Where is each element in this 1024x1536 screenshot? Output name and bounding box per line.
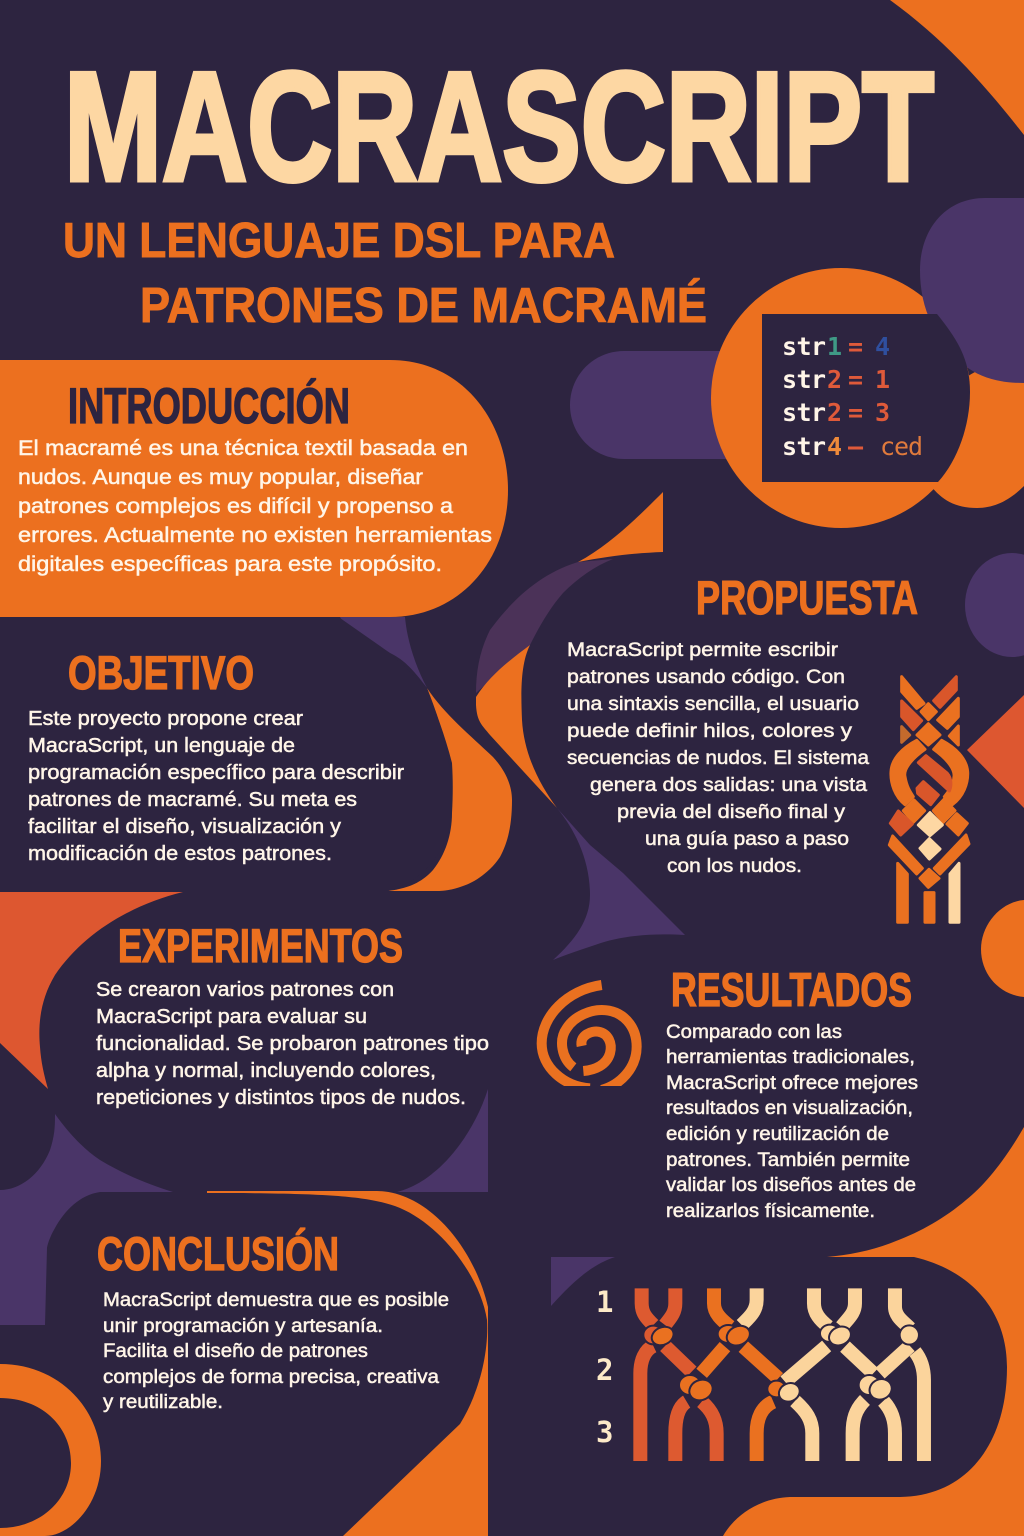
body: objetivo — [28, 708, 404, 865]
body: propuesta: una guía paso a paso — [645, 828, 849, 850]
body: experimentos: Se crearon varios patrones con — [96, 979, 394, 1001]
heading: propuesta: PROPUESTA — [696, 571, 918, 624]
code lines: 1 — [875, 365, 890, 394]
purple blob right of propuesta — [965, 553, 1024, 657]
red diamond right edge — [967, 695, 1024, 808]
code lines: = — [848, 398, 863, 427]
body: resultados: resultados en visualización, — [666, 1098, 913, 1119]
orange shape bottom right — [723, 1127, 1024, 1536]
panel: propuesta — [560, 571, 920, 880]
row numbers: 2 — [596, 1353, 613, 1387]
body: conclusión — [103, 1290, 449, 1413]
code lines: 4 — [827, 432, 842, 461]
body: experimentos: MacraScript para evaluar su — [96, 1006, 367, 1028]
body: introducción: digitales específicas para este propósito. — [18, 553, 442, 576]
row numbers: 1 — [596, 1285, 613, 1319]
icon: macramé pattern — [889, 677, 969, 922]
body: propuesta: con los nudos. — [667, 855, 802, 877]
code lines: ced — [880, 432, 923, 461]
body: introducción — [18, 437, 492, 576]
body: experimentos: funcionalidad. Se probaron patrones tipo — [96, 1033, 489, 1055]
body: experimentos: repeticiones y distintos tipos de nudos. — [96, 1087, 466, 1109]
panel: experimentos — [90, 919, 490, 1115]
body: propuesta — [567, 639, 869, 877]
purple shapes between experimentos and conclusión — [0, 1089, 488, 1325]
body: resultados: Comparado con las — [666, 1022, 842, 1043]
body: introducción: nudos. Aunque es muy popular, diseñar — [18, 466, 423, 489]
heading: conclusión: CONCLUSIÓN — [97, 1227, 339, 1280]
row numbers — [596, 1285, 613, 1449]
code lines: 4 — [875, 332, 890, 361]
code lines: 2 — [827, 398, 842, 427]
code lines: – — [848, 432, 864, 461]
body: objetivo: MacraScript, un lenguaje de — [28, 735, 295, 757]
code lines: = — [848, 365, 863, 394]
icon: spiral — [542, 985, 637, 1090]
body: objetivo: modificación de estos patrones. — [28, 843, 332, 865]
purple corner of knot panel — [551, 1257, 615, 1306]
body: experimentos: alpha y normal, incluyendo colores, — [96, 1060, 436, 1082]
body: conclusión: unir programación y artesanía. — [103, 1316, 383, 1337]
body: conclusión: Facilita el diseño de patrones — [103, 1341, 368, 1362]
body: propuesta: una sintaxis sencilla, el usuario — [567, 693, 859, 715]
code panel — [762, 314, 970, 482]
heading: experimentos: EXPERIMENTOS — [118, 919, 403, 972]
body: resultados: edición y reutilización de — [666, 1124, 889, 1145]
orange border of conclusión — [207, 1191, 488, 1536]
body: introducción: El macramé es una técnica textil basada en — [18, 437, 468, 460]
body: propuesta: previa del diseño final y — [617, 801, 845, 823]
body: conclusión: y reutilizable. — [103, 1392, 223, 1413]
body: propuesta: puede definir hilos, colores y — [567, 720, 852, 742]
code lines: str — [782, 398, 826, 427]
body: objetivo: Este proyecto propone crear — [28, 708, 303, 730]
orange crescent right of objetivo — [388, 688, 512, 891]
body: introducción: errores. Actualmente no existen herramientas — [18, 524, 492, 547]
body: resultados: patrones. También permite — [666, 1150, 910, 1171]
orange blob right edge — [981, 900, 1024, 997]
purple pill behind code panel — [570, 351, 730, 459]
orange tip and purple swoosh — [476, 492, 685, 960]
orange crescent left of propuesta — [476, 645, 557, 808]
orange lobe behind code panel — [926, 372, 1024, 508]
knot strands and knots — [640, 1288, 924, 1461]
body: objetivo: programación específico para describir — [28, 762, 404, 784]
purple blob top right — [920, 198, 1024, 383]
body: propuesta: patrones usando código. Con — [567, 666, 845, 688]
body: conclusión: complejos de forma precisa, creativa — [103, 1367, 439, 1388]
body: objetivo: facilitar el diseño, visualización y — [28, 816, 341, 838]
purple wedge below propuesta — [553, 808, 685, 960]
subtitle: PATRONES DE MACRAMÉ — [140, 279, 707, 333]
body: propuesta: genera dos salidas: una vista — [590, 774, 867, 796]
panel: objetivo — [0, 618, 452, 891]
heading: introducción: INTRODUCCIÓN — [68, 378, 350, 434]
heading: resultados: RESULTADOS — [671, 963, 912, 1016]
row numbers: 3 — [596, 1415, 613, 1449]
body: resultados: validar los diseños antes de — [666, 1175, 916, 1196]
panel: introducción — [0, 360, 508, 617]
body: propuesta: MacraScript permite escribir — [567, 639, 839, 661]
code lines: str — [782, 432, 826, 461]
code lines: str — [782, 365, 826, 394]
body: conclusión: MacraScript demuestra que es posible — [103, 1290, 449, 1311]
body: propuesta: secuencias de nudos. El sistema — [567, 747, 869, 769]
body: resultados: realizarlos físicamente. — [666, 1201, 875, 1222]
red shape left of experimentos — [0, 892, 183, 1089]
code lines: 3 — [875, 398, 890, 427]
orange triangle tip — [578, 492, 663, 562]
heading: objetivo: OBJETIVO — [68, 646, 254, 699]
panel: resultados — [660, 963, 920, 1225]
ring bottom left — [0, 1364, 101, 1536]
code lines — [782, 332, 923, 461]
code lines: 2 — [827, 365, 842, 394]
corner shape: top right orange — [890, 0, 1024, 135]
code lines: = — [848, 332, 863, 361]
body: experimentos — [96, 979, 489, 1109]
code lines: 1 — [827, 332, 842, 361]
body: resultados — [666, 1022, 918, 1222]
code lines: str — [782, 332, 826, 361]
body: resultados: MacraScript ofrece mejores — [666, 1073, 918, 1094]
knot diagram — [590, 1285, 940, 1463]
subtitle: UN LENGUAJE DSL PARA — [63, 214, 615, 268]
body: objetivo: patrones de macramé. Su meta es — [28, 789, 357, 811]
orange circle behind code panel — [711, 268, 971, 528]
panel: conclusión — [95, 1227, 455, 1415]
purple wedge below introduction — [340, 617, 427, 688]
subtitle — [63, 214, 707, 333]
body: resultados: herramientas tradicionales, — [666, 1047, 915, 1068]
body: introducción: patrones complejos es difícil y propenso a — [18, 495, 453, 518]
